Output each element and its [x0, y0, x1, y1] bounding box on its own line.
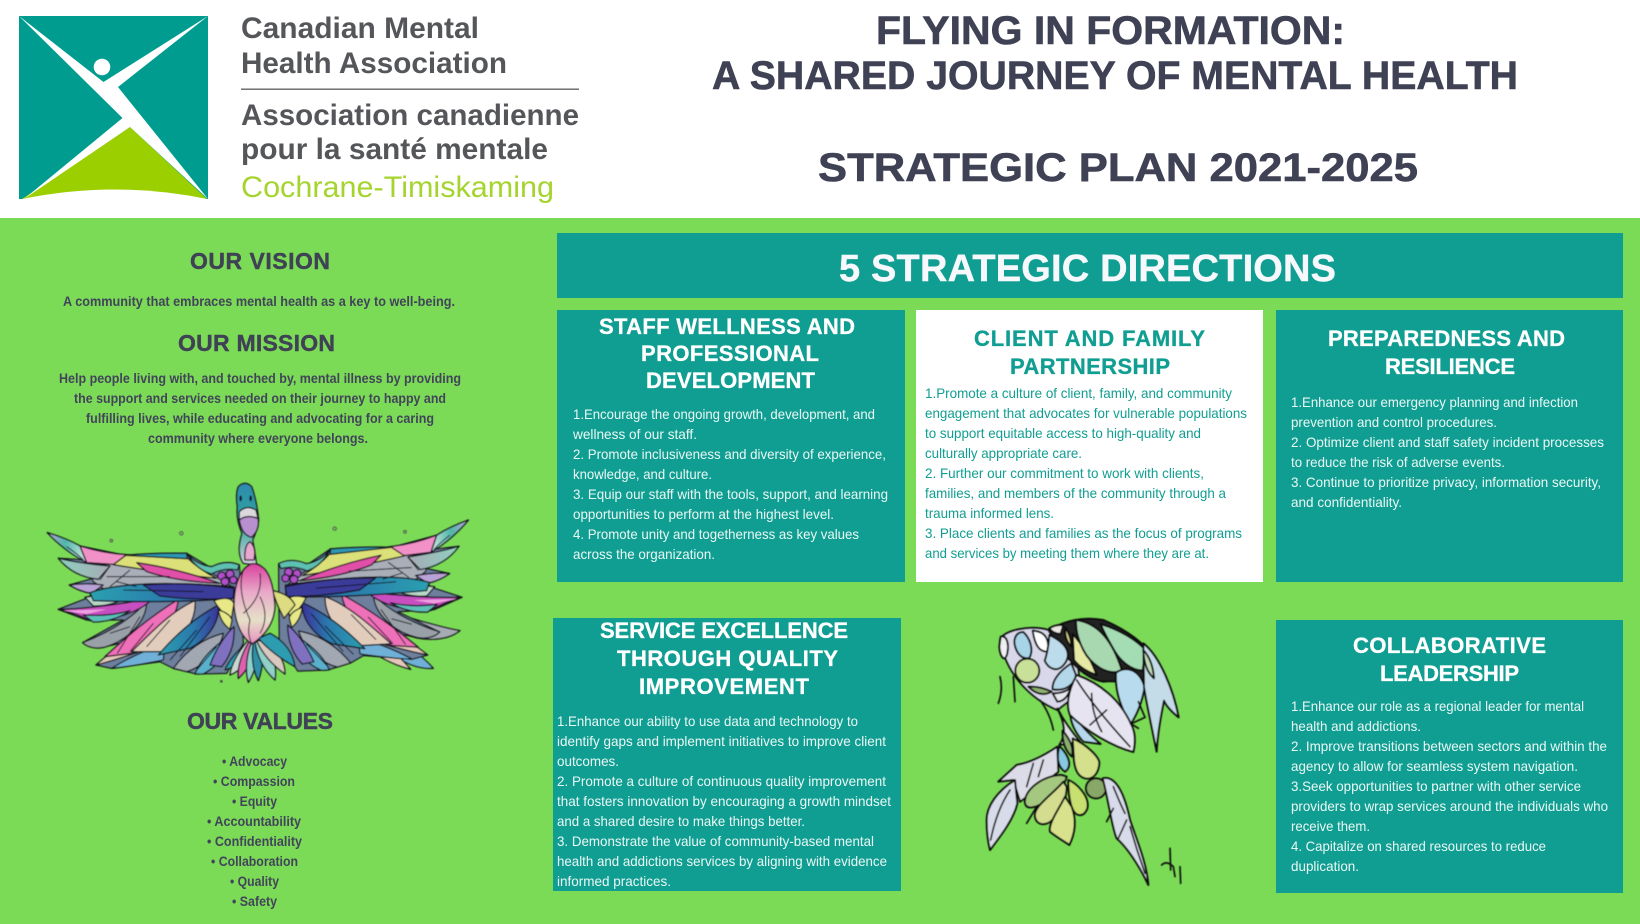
heading: PROFESSIONAL [641, 341, 819, 366]
body list [572, 406, 888, 562]
heading: our values: OUR VALUES [187, 708, 333, 734]
panel: staff wellness and professional development [557, 310, 905, 582]
heading: COLLABORATIVE [1353, 633, 1546, 658]
body list: 1.Encourage the ongoing growth, development, and [573, 406, 875, 422]
body list: 3. Equip our staff with the tools, support, and learning [573, 486, 888, 502]
body list: culturally appropriate care. [925, 445, 1082, 461]
mission statement: Help people living with, and touched by, mental illness by providing [59, 371, 461, 386]
values list [207, 754, 302, 909]
title: STRATEGIC PLAN 2021-2025 [818, 146, 1418, 190]
body list: 3.Seek opportunities to partner with other service [1291, 778, 1581, 794]
body list: prevention and control procedures. [1291, 414, 1497, 430]
body list: 1.Promote a culture of client, family, and community [925, 385, 1232, 401]
body list: opportunities to perform at the highest level. [573, 506, 834, 522]
heading: STAFF WELLNESS AND [599, 314, 855, 339]
green body background [0, 218, 1640, 924]
title: A SHARED JOURNEY OF MENTAL HEALTH [712, 54, 1518, 98]
heading [600, 618, 848, 699]
heading [1353, 633, 1546, 686]
body list: 2. Promote inclusiveness and diversity of experience, [573, 446, 886, 462]
heading: PREPAREDNESS AND [1328, 326, 1565, 351]
heading: PARTNERSHIP [1010, 354, 1170, 379]
heading [1328, 326, 1565, 379]
body list [557, 713, 891, 889]
mission statement: fulfilling lives, while educating and advocating for a caring [86, 411, 434, 426]
body list: 4. Capitalize on shared resources to reduce [1291, 838, 1546, 854]
title: FLYING IN FORMATION: [876, 9, 1345, 53]
body list: 3. Continue to prioritize privacy, information security, [1291, 474, 1601, 490]
logo wordmark: Health Association [241, 47, 507, 80]
body list: engagement that advocates for vulnerable populations [925, 405, 1247, 421]
panel: service excellence through quality improvement [553, 618, 901, 891]
mission statement: community where everyone belongs. [148, 431, 368, 446]
logo: Canadian Mental Health Association [19, 12, 579, 204]
heading: SERVICE EXCELLENCE [600, 618, 848, 643]
heading [974, 326, 1205, 379]
body list: to support equitable access to high-quality and [925, 425, 1201, 441]
mission statement [59, 371, 461, 446]
body list: agency to allow for seamless system navigation. [1291, 758, 1578, 774]
mission statement: the support and services needed on their journey to happy and [74, 391, 446, 406]
body list: health and addictions services by aligning with evidence [557, 853, 887, 869]
logo wordmark [241, 12, 579, 204]
title [712, 9, 1518, 190]
body list: outcomes. [557, 753, 619, 769]
logo wordmark: pour la santé mentale [241, 133, 548, 166]
values list: • Safety [232, 894, 277, 909]
heading [599, 314, 855, 393]
body list: 3. Demonstrate the value of community-based mental [557, 833, 874, 849]
heading: RESILIENCE [1385, 354, 1515, 379]
body list: and a shared desire to make things better. [557, 813, 805, 829]
body list [925, 385, 1247, 561]
panel: client and family partnership [916, 310, 1263, 582]
body list: knowledge, and culture. [573, 466, 712, 482]
values list: • Advocacy [222, 754, 287, 769]
body list: to reduce the risk of adverse events. [1291, 454, 1505, 470]
body list: across the organization. [573, 546, 715, 562]
heading: THROUGH QUALITY [617, 646, 838, 671]
body list: duplication. [1291, 858, 1359, 874]
icon: CMHA figure mark [19, 16, 208, 200]
values list: • Collaboration [211, 854, 298, 869]
values list: • Compassion [213, 774, 295, 789]
values list: • Confidentiality [207, 834, 302, 849]
body list: 2. Further our commitment to work with clients, [925, 465, 1204, 481]
panel: preparedness and resilience [1276, 310, 1623, 582]
icon: goose illustration [47, 483, 477, 683]
banner: 5 strategic directions: 5 STRATEGIC DIRECTIONS [839, 248, 1336, 290]
heading: CLIENT AND FAMILY [974, 326, 1205, 351]
body list: trauma informed lens. [925, 505, 1054, 521]
body list: providers to wrap services around the individuals who [1291, 798, 1608, 814]
body list: 2. Optimize client and staff safety incident processes [1291, 434, 1604, 450]
body list: identify gaps and implement initiatives to improve client [557, 733, 886, 749]
body list: wellness of our staff. [572, 426, 697, 442]
heading: IMPROVEMENT [639, 674, 810, 699]
body list [1291, 394, 1604, 510]
body list: that fosters innovation by encouraging a growth mindset [557, 793, 891, 809]
logo wordmark: Cochrane-Timiskaming [241, 171, 554, 204]
heading: our mission: OUR MISSION [178, 330, 335, 356]
body list: 3. Place clients and families as the focus of programs [925, 525, 1242, 541]
body list: and confidentiality. [1291, 494, 1402, 510]
values list: • Accountability [207, 814, 301, 829]
heading: LEADERSHIP [1380, 661, 1519, 686]
body list: families, and members of the community through a [925, 485, 1226, 501]
body list: 1.Enhance our role as a regional leader for mental [1291, 698, 1584, 714]
panel: left column vision mission values [47, 248, 477, 909]
banner: 5 strategic directions [557, 233, 1623, 298]
body list: receive them. [1291, 818, 1370, 834]
body list: informed practices. [557, 873, 671, 889]
values list: • Quality [230, 874, 279, 889]
body list: 1.Enhance our ability to use data and technology to [557, 713, 858, 729]
heading: our vision: OUR VISION [190, 248, 330, 274]
body list: and services by meeting them where they are at. [925, 545, 1209, 561]
body list: health and addictions. [1291, 718, 1421, 734]
icon: head illustration [987, 619, 1181, 885]
body list: 4. Promote unity and togetherness as key values [573, 526, 859, 542]
heading: DEVELOPMENT [646, 368, 816, 393]
logo wordmark: Association canadienne [241, 99, 579, 132]
body list: 2. Improve transitions between sectors and within the [1291, 738, 1607, 754]
values list: • Equity [232, 794, 277, 809]
body list [1291, 698, 1608, 874]
vision statement: A community that embraces mental health as a key to well-being. [63, 294, 455, 309]
logo wordmark: Canadian Mental [241, 12, 479, 45]
body list: 1.Enhance our emergency planning and infection [1291, 394, 1578, 410]
body list: 2. Promote a culture of continuous quality improvement [557, 773, 886, 789]
panel: collaborative leadership [1276, 620, 1623, 893]
